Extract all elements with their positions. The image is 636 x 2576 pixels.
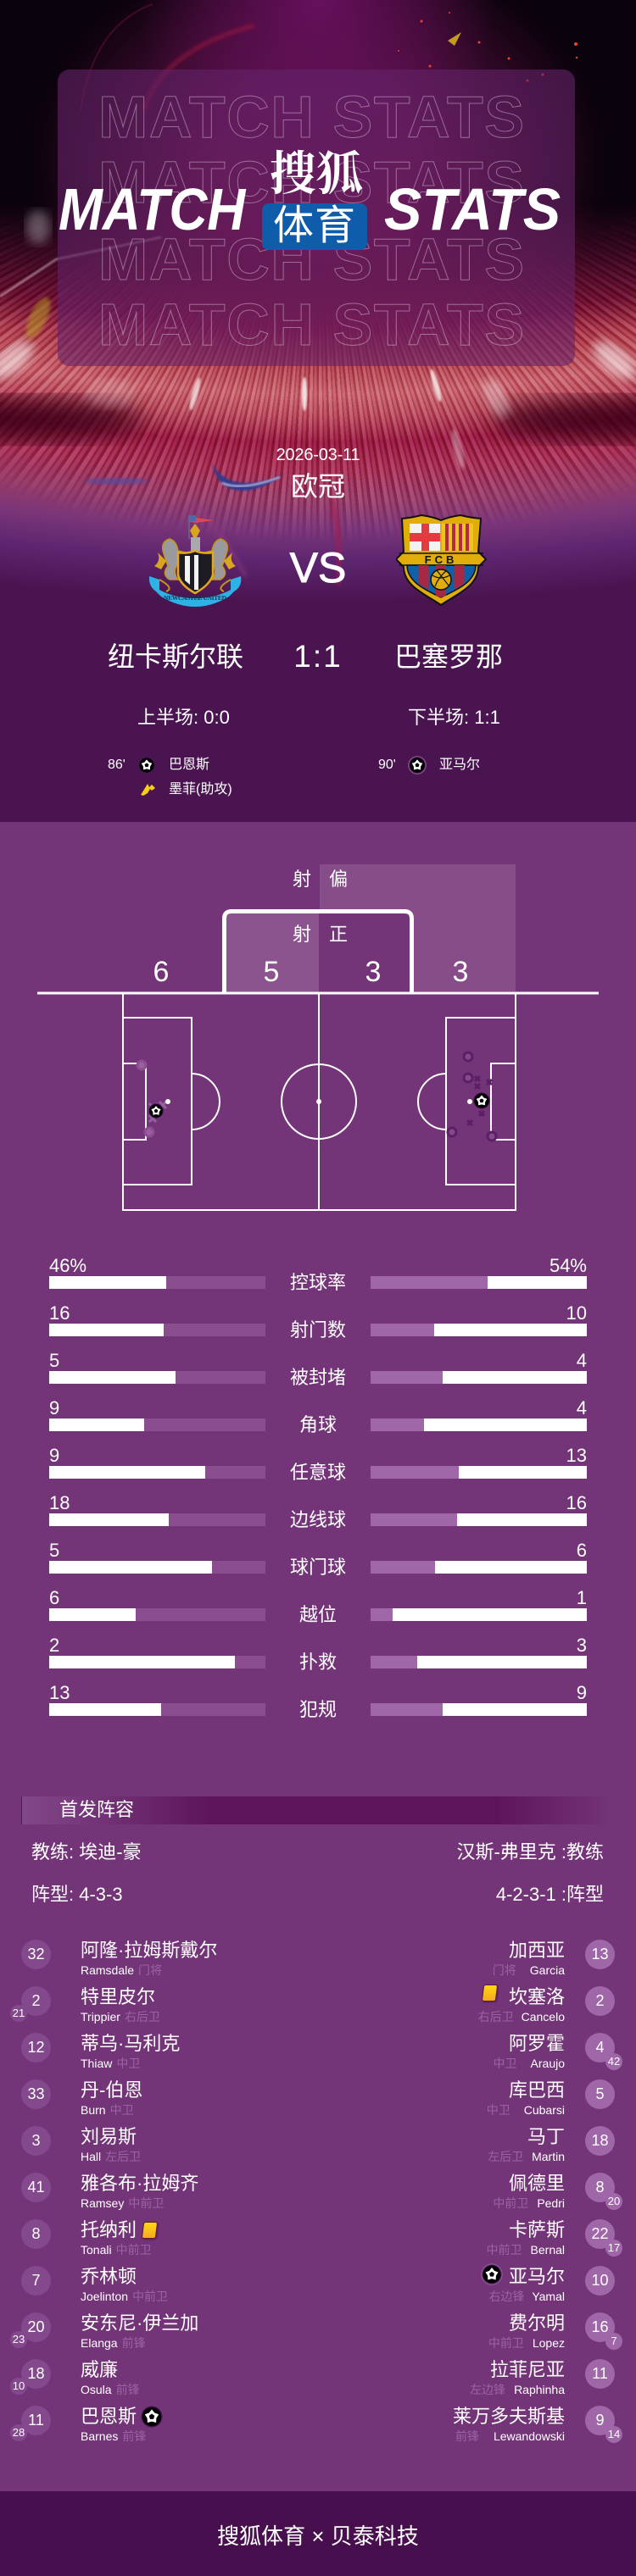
player: Osula: Osula 前锋 — [81, 2383, 140, 2396]
stat row: fouls — [49, 1682, 587, 1720]
title: MATCH: MATCH — [59, 176, 245, 242]
player: Cubarsi: 中卫 Cubarsi — [487, 2103, 565, 2117]
player: Bernal — [487, 2219, 622, 2257]
player: Ramsdale: 阿隆·拉姆斯戴尔 — [81, 1940, 217, 1961]
logo: sohu: 搜狐 — [270, 148, 363, 200]
assist: 墨菲(助攻) — [169, 782, 232, 797]
player: Ramsey: 41 — [27, 2179, 45, 2196]
player: Yamal — [481, 2263, 615, 2303]
logo: sports badge: 体育 — [273, 203, 356, 248]
player: Elanga: 20 — [27, 2318, 45, 2335]
stat row: offsides: 1 — [577, 1587, 587, 1608]
away goal event — [378, 756, 480, 774]
stat row: shots — [49, 1302, 587, 1341]
stat row: offsides — [49, 1587, 587, 1625]
home team name: 纽卡斯尔联 — [108, 641, 243, 672]
player: Yamal: 右边锋 Yamal — [488, 2290, 565, 2303]
player: Joelinton: 7 — [31, 2272, 41, 2289]
player: Burn: 丹-伯恩 — [81, 2079, 142, 2101]
player: Lewandowski: 前锋 Lewandowski — [455, 2429, 565, 2443]
player: Joelinton: Joelinton 中前卫 — [81, 2290, 168, 2303]
player: Raphinha: 左边锋 Raphinha — [470, 2383, 565, 2396]
away coach: 汉斯-弗里克 :教练 — [456, 1841, 604, 1863]
player: Thiaw: Thiaw 中卫 — [81, 2057, 140, 2070]
player: Barnes: Barnes 前锋 — [81, 2429, 146, 2443]
player: Lewandowski: 14 — [608, 2428, 620, 2440]
pitch lines — [123, 993, 516, 1210]
title panel — [58, 69, 575, 366]
player: Cubarsi: 库巴西 — [509, 2079, 565, 2101]
player: Ramsey: 雅各布·拉姆齐 — [81, 2173, 198, 2194]
goal line — [37, 991, 599, 995]
crest: FC Barcelona — [396, 514, 487, 606]
stat row: possession: 控球率 — [290, 1272, 346, 1293]
score: 1:1 — [293, 639, 343, 674]
player: Elanga: 安东尼·伊兰加 — [81, 2312, 198, 2334]
stat row: fouls: 犯规 — [299, 1699, 337, 1720]
stat row: fouls: 9 — [577, 1682, 587, 1703]
player: Osula — [10, 2359, 140, 2396]
player: Ramsdale — [21, 1940, 217, 1977]
stat row: goal kicks: 5 — [49, 1540, 59, 1561]
player: Martin: 左后卫 Martin — [488, 2150, 565, 2163]
stat row: saves: 3 — [577, 1635, 587, 1656]
panel: on-target area — [224, 912, 412, 992]
icon: assist boot — [141, 784, 155, 796]
player: Burn: Burn 中卫 — [81, 2103, 134, 2117]
player: Ramsey — [21, 2173, 198, 2210]
crest: FC Barcelona: FCB — [425, 553, 457, 566]
player: Garcia: 13 — [591, 1946, 609, 1963]
player: Hall: 3 — [31, 2132, 41, 2149]
stat row: goal kicks: 球门球 — [290, 1557, 346, 1578]
label: off target: 偏 — [329, 869, 348, 890]
player: Osula: 威廉 — [81, 2359, 118, 2380]
player: Araujo: 4 — [595, 2039, 604, 2056]
shots on pitch graphic — [37, 864, 599, 1211]
player: Cancelo: 坎塞洛 — [509, 1986, 565, 2007]
stat row: throw-ins — [49, 1492, 587, 1530]
player: Lewandowski: 9 — [595, 2412, 604, 2429]
player: Ramsdale: 32 — [27, 1946, 45, 1963]
player: Pedri: 佩德里 — [509, 2173, 565, 2194]
stat row: blocked: 被封堵 — [290, 1367, 346, 1388]
panel: off-target area — [320, 864, 516, 991]
vs: VS — [290, 544, 346, 591]
player: Pedri: 20 — [608, 2195, 620, 2207]
home coach: 教练: 埃迪-豪 — [31, 1841, 142, 1863]
stat row: throw-ins: 18 — [49, 1492, 70, 1513]
stat row: corners: 9 — [49, 1397, 59, 1418]
stat row: offsides: 6 — [49, 1587, 59, 1608]
home goal event — [108, 758, 232, 797]
label: on target: 正 — [329, 924, 348, 945]
player: Hall: 刘易斯 — [81, 2126, 137, 2147]
player: Tonali: 托纳利 — [81, 2219, 137, 2240]
heading: 首发阵容 — [59, 1799, 134, 1820]
player: Elanga — [10, 2312, 198, 2350]
goal frame — [224, 912, 412, 992]
first half score: 上半场: 0:0 — [137, 707, 230, 728]
player: Hall: Hall 左后卫 — [81, 2150, 141, 2163]
footer: 搜狐体育 × 贝泰科技 — [217, 2523, 419, 2549]
stat row: free kicks — [49, 1445, 587, 1483]
player: Yamal: 亚马尔 — [509, 2266, 565, 2287]
player: Lopez: 中前卫 Lopez — [488, 2336, 565, 2350]
stat row: free kicks: 9 — [49, 1445, 59, 1466]
player: Raphinha: 11 — [592, 2365, 608, 2382]
label: off target: 射 — [293, 869, 311, 890]
competition: 欧冠 — [291, 471, 345, 502]
player: Martin: 18 — [591, 2132, 609, 2149]
player: Thiaw: 12 — [27, 2039, 45, 2056]
stat row: saves: 扑救 — [299, 1652, 337, 1673]
label: on target: 射 — [293, 924, 311, 945]
stat row: shots: 16 — [49, 1302, 70, 1324]
player: Araujo — [494, 2033, 622, 2070]
label: on target — [293, 924, 348, 945]
stat row: free kicks: 任意球 — [290, 1462, 346, 1483]
player: Bernal: 22 — [591, 2225, 609, 2242]
stat row: possession: 46% — [49, 1255, 86, 1276]
away shot markers — [448, 1052, 496, 1141]
stat row: blocked — [49, 1350, 587, 1388]
player: Ramsdale: Ramsdale 门将 — [81, 1963, 162, 1977]
player: Lopez — [488, 2312, 622, 2350]
player: Lopez: 7 — [611, 2334, 617, 2347]
footer — [0, 2491, 636, 2576]
stat row: throw-ins: 16 — [566, 1492, 587, 1513]
stat row: possession — [49, 1255, 587, 1293]
stat row: corners: 角球 — [299, 1414, 337, 1435]
player: Bernal: 中前卫 Bernal — [487, 2243, 565, 2257]
shot counts — [153, 956, 468, 988]
shot counts: 6 — [153, 956, 169, 988]
stat row: possession: 54% — [550, 1255, 587, 1276]
stat row: goal kicks — [49, 1540, 587, 1578]
player: Ramsey: Ramsey 中前卫 — [81, 2196, 164, 2210]
player: Yamal: 10 — [591, 2272, 609, 2289]
stat row: fouls: 13 — [49, 1682, 70, 1703]
crest: Newcastle United — [149, 515, 241, 607]
stat row: offsides: 越位 — [299, 1604, 337, 1625]
player: Lopez: 16 — [591, 2318, 609, 2335]
player: Cubarsi — [487, 2079, 615, 2117]
player: Tonali: 8 — [31, 2225, 41, 2242]
stat row: throw-ins: 边线球 — [290, 1509, 346, 1530]
player: Trippier: 特里皮尔 — [81, 1986, 155, 2007]
stat row: corners: 4 — [577, 1397, 587, 1418]
minute: 86' — [108, 758, 126, 772]
icon: goal ball — [139, 758, 154, 773]
stat row: shots: 射门数 — [290, 1319, 346, 1341]
title: STATS: STATS — [384, 176, 561, 242]
player: Hall — [21, 2126, 141, 2163]
player: Thiaw: 蒂乌·马利克 — [81, 2033, 180, 2054]
second half score: 下半场: 1:1 — [408, 707, 500, 728]
shot counts: 3 — [453, 956, 468, 988]
player: Garcia — [493, 1940, 615, 1977]
shot counts: 3 — [365, 956, 381, 988]
player: Barnes: 28 — [13, 2426, 25, 2439]
player: Barnes: 11 — [28, 2412, 44, 2429]
player: Trippier: 21 — [13, 2007, 25, 2019]
lineup heading band — [21, 1796, 615, 1824]
icon: goal ball — [408, 756, 427, 774]
player: Garcia: 加西亚 — [509, 1940, 565, 1961]
scorer: 亚马尔 — [439, 758, 480, 772]
stat row: corners — [49, 1397, 587, 1435]
player: Cancelo — [478, 1985, 615, 2024]
scorer: 巴恩斯 — [169, 758, 209, 772]
player: Trippier: 2 — [31, 1992, 41, 2009]
player: Lopez: 费尔明 — [509, 2312, 565, 2334]
player: Araujo: 42 — [608, 2055, 620, 2068]
stat row: saves: 2 — [49, 1635, 59, 1656]
player: Raphinha: 拉菲尼亚 — [490, 2359, 565, 2380]
player: Araujo: 中卫 Araujo — [494, 2057, 565, 2070]
player: Martin: 马丁 — [527, 2126, 565, 2147]
home formation: 阵型: 4-3-3 — [31, 1884, 123, 1905]
home shot markers — [137, 1061, 170, 1136]
player: Thiaw — [21, 2033, 180, 2070]
player: Raphinha — [470, 2359, 615, 2396]
player: Osula: 18 — [27, 2365, 45, 2382]
player: Pedri — [493, 2173, 622, 2210]
crest: Newcastle United: NEWCASTLE UNITED — [164, 594, 227, 602]
player: Elanga: 23 — [13, 2333, 25, 2346]
hero background — [0, 0, 636, 822]
stat row: blocked: 5 — [49, 1350, 59, 1371]
stat row: blocked: 4 — [577, 1350, 587, 1371]
player: Bernal: 17 — [608, 2241, 620, 2254]
player: Araujo: 阿罗霍 — [509, 2033, 565, 2054]
player: Cancelo: 2 — [595, 1992, 604, 2009]
player: Bernal: 卡萨斯 — [509, 2219, 565, 2240]
stat row: free kicks: 13 — [566, 1445, 587, 1466]
player: Pedri: 8 — [595, 2179, 604, 2196]
player: Trippier: Trippier 右后卫 — [81, 2010, 160, 2024]
shot counts: 5 — [264, 956, 279, 988]
away formation: 4-2-3-1 :阵型 — [496, 1884, 604, 1905]
match date: 2026-03-11 — [276, 446, 360, 464]
stat row: shots: 10 — [566, 1302, 587, 1324]
stat row: saves — [49, 1635, 587, 1673]
player: Lewandowski — [453, 2406, 622, 2443]
player: Burn: 33 — [27, 2085, 45, 2102]
minute: 90' — [378, 758, 396, 772]
player: Martin — [488, 2126, 615, 2163]
player: Lewandowski: 莱万多夫斯基 — [453, 2406, 565, 2427]
stat row: goal kicks: 6 — [577, 1540, 587, 1561]
player: Cubarsi: 5 — [595, 2085, 604, 2102]
player: Cancelo: 右后卫 Cancelo — [478, 2010, 565, 2024]
player: Joelinton: 乔林顿 — [81, 2266, 137, 2287]
label: off target — [293, 869, 348, 890]
player: Joelinton — [21, 2266, 168, 2303]
player: Trippier — [10, 1986, 160, 2024]
player: Burn — [21, 2079, 142, 2117]
player: Tonali — [21, 2219, 159, 2257]
player: Osula: 10 — [13, 2379, 25, 2392]
player: Barnes: 巴恩斯 — [81, 2406, 137, 2427]
player: Pedri: 中前卫 Pedri — [493, 2196, 565, 2210]
player: Barnes — [10, 2406, 163, 2443]
player: Garcia: 门将 Garcia — [493, 1963, 565, 1977]
player: Elanga: Elanga 前锋 — [81, 2336, 146, 2350]
player: Tonali: Tonali 中前卫 — [81, 2243, 152, 2257]
away team name: 巴塞罗那 — [394, 641, 503, 672]
